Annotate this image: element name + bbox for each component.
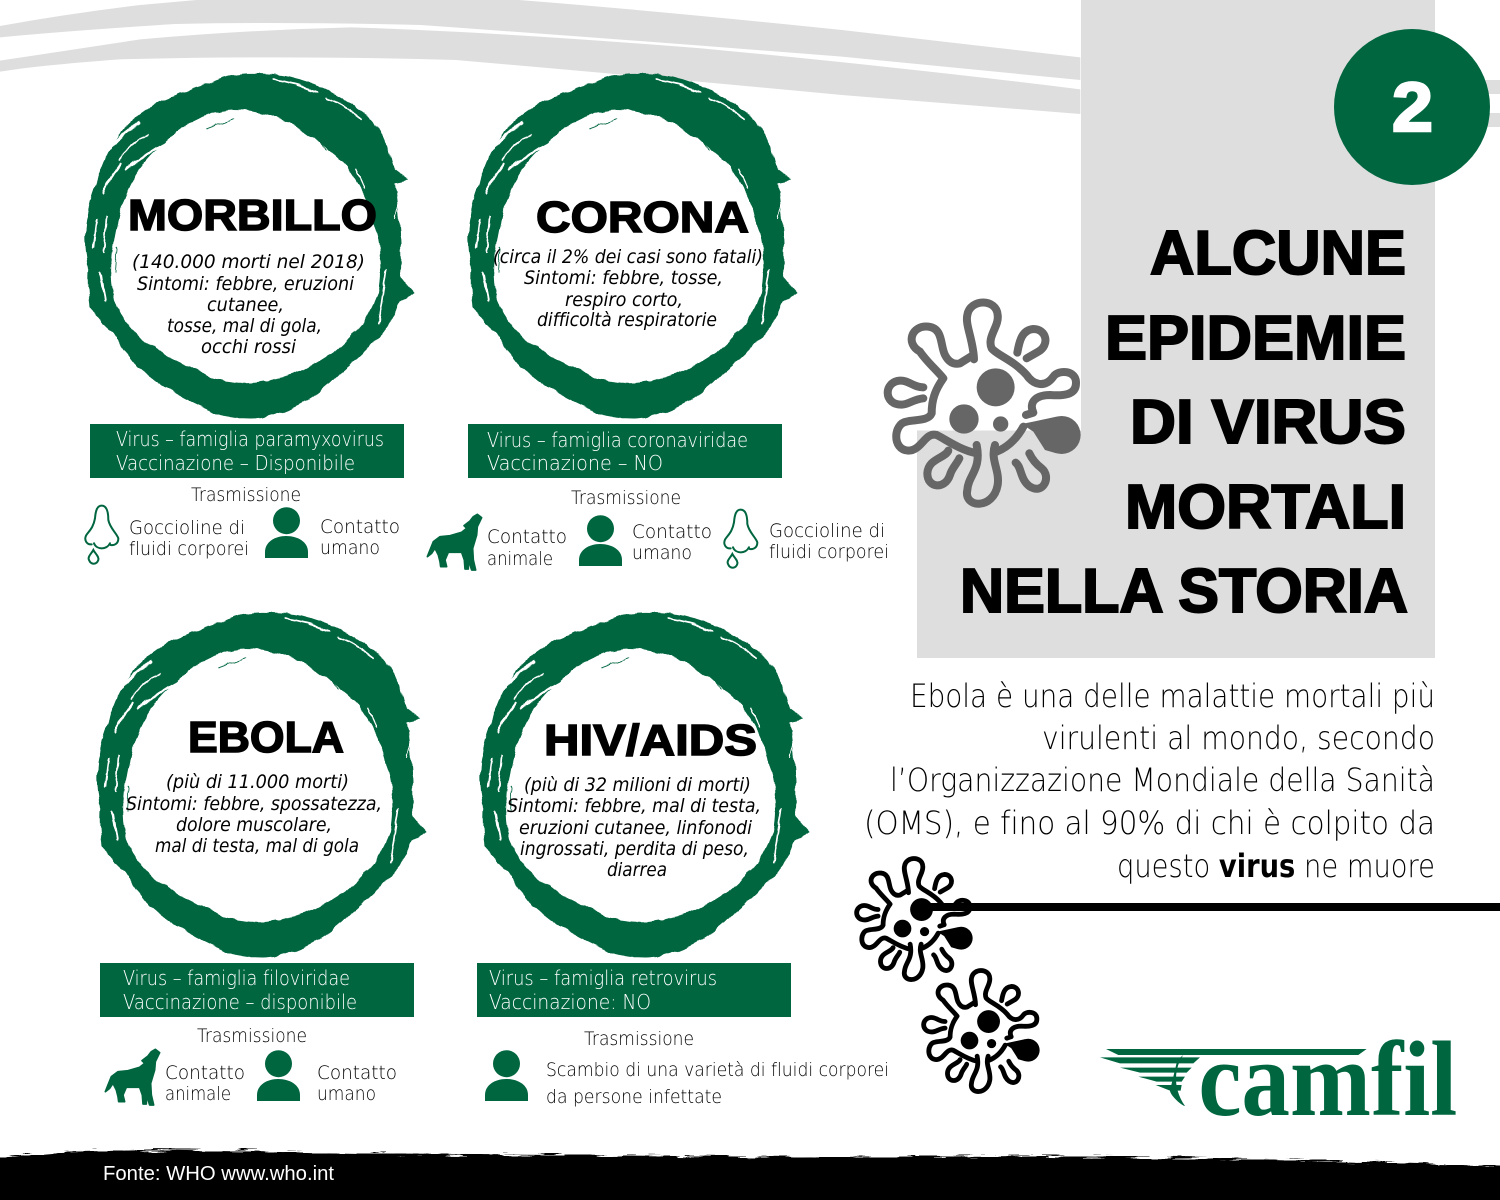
brush ring: Morbillo [85, 73, 415, 419]
icon: black virus lower [924, 971, 1040, 1092]
heading: Ebola: EBOLA [188, 713, 344, 762]
text block: Ebola description: Ebola è una delle malattie mortali più [910, 677, 1435, 715]
symptoms: Corona [493, 246, 763, 331]
symptoms: Morbillo: tosse, mal di gola, [167, 315, 322, 337]
symptoms: Morbillo: (140.000 morti nel 2018) [132, 251, 365, 273]
transmission: Corona: animale [487, 548, 553, 570]
title: EPIDEMIE [1105, 304, 1406, 373]
symptoms: HIV/AIDS: (più di 32 milioni di morti) [524, 774, 751, 796]
symptoms: Corona: difficoltà respiratorie [537, 309, 717, 331]
text block: Ebola description: questo virus ne muore [1117, 847, 1435, 885]
symptoms: Ebola: Sintomi: febbre, spossatezza, [126, 793, 382, 815]
text block: Ebola description [864, 677, 1435, 885]
transmission: Ebola [105, 1025, 397, 1105]
Camfil logo [1100, 1021, 1457, 1139]
info box: Corona [468, 424, 782, 478]
text block: Ebola description: l’Organizzazione Mondiale della Sanità [890, 761, 1435, 799]
symptoms: HIV/AIDS: Sintomi: febbre, mal di testa, [507, 795, 761, 817]
symptoms: Ebola: (più di 11.000 morti) [166, 771, 349, 793]
info box: HIV/AIDS: Vaccinazione: NO [489, 990, 651, 1014]
title: NELLA STORIA [960, 557, 1408, 626]
brush ring: HIV/AIDS [480, 612, 810, 958]
info box: HIV/AIDS [477, 963, 791, 1017]
transmission: Morbillo: fluidi corporei [129, 538, 249, 560]
symptoms: Morbillo: cutanee, [207, 294, 284, 316]
footer brush band [0, 1150, 1500, 1200]
info box: HIV/AIDS: Virus – famiglia retrovirus [489, 966, 717, 990]
symptoms: HIV/AIDS: eruzioni cutanee, linfonodi [519, 817, 753, 839]
transmission: Morbillo: Goccioline di [129, 517, 245, 539]
symptoms: Corona: (circa il 2% dei casi sono fatali) [493, 246, 763, 268]
transmission: Morbillo: Trasmissione [191, 484, 301, 506]
info box: Corona: Virus – famiglia coronaviridae [487, 428, 748, 452]
symptoms: Corona: Sintomi: febbre, tosse, [524, 267, 723, 289]
transmission: Corona: Contatto [632, 521, 712, 543]
transmission: Morbillo: umano [320, 537, 380, 559]
transmission: Corona: Goccioline di [769, 520, 885, 542]
transmission: Corona: Contatto [487, 526, 567, 548]
symptoms: Morbillo: occhi rossi [201, 336, 297, 358]
heading: Corona: CORONA [536, 193, 749, 242]
footer source text: Fonte: WHO www.who.int [103, 1163, 334, 1185]
title: MORTALI [1125, 473, 1406, 542]
heading: HIV/AIDS: HIV/AIDS [544, 716, 757, 765]
brush ring: Ebola [97, 612, 427, 958]
transmission: HIV/AIDS: da persone infettate [546, 1086, 722, 1108]
icon: black virus upper [857, 859, 973, 980]
transmission: Corona: umano [632, 542, 692, 564]
text block: Ebola description: (OMS), e fino al 90% di chi è colpito da [864, 804, 1435, 842]
symptoms: HIV/AIDS [507, 774, 761, 881]
number badge [1334, 29, 1490, 185]
transmission: Ebola: Contatto [165, 1062, 245, 1084]
info box: Ebola [100, 963, 414, 1017]
heading: Morbillo: MORBILLO [128, 191, 377, 240]
grey title background panel [917, 0, 1435, 658]
transmission: Ebola: umano [317, 1083, 376, 1105]
symptoms: HIV/AIDS: diarrea [607, 859, 667, 881]
text block: Ebola description: virulenti al mondo, secondo [1042, 719, 1435, 757]
symptoms: Morbillo: Sintomi: febbre, eruzioni [137, 273, 355, 295]
symptoms: Ebola: mal di testa, mal di gola [155, 835, 359, 857]
title: ALCUNE [1150, 219, 1406, 288]
transmission: Ebola: animale [165, 1083, 231, 1105]
transmission: Corona: Trasmissione [571, 487, 681, 509]
Camfil logo: camfil [1198, 1021, 1457, 1139]
info box: Morbillo: Vaccinazione – Disponibile [116, 451, 355, 475]
info box: Morbillo: Virus – famiglia paramyxovirus [116, 427, 384, 451]
transmission: Corona: fluidi corporei [769, 541, 889, 563]
title: DI VIRUS [1130, 388, 1406, 457]
transmission: HIV/AIDS [485, 1028, 889, 1108]
transmission: Morbillo [85, 484, 400, 564]
transmission: Morbillo: Contatto [320, 516, 400, 538]
number badge: 2 [1392, 68, 1433, 146]
symptoms: Corona: respiro corto, [565, 289, 683, 311]
symptoms: HIV/AIDS: ingrossati, perdita di peso, [520, 838, 749, 860]
symptoms: Ebola [126, 771, 382, 857]
transmission: HIV/AIDS: Scambio di una varietà di fluidi corporei [546, 1059, 889, 1081]
transmission: Corona [427, 487, 889, 570]
transmission: HIV/AIDS: Trasmissione [584, 1028, 694, 1050]
icon: large grey virus [888, 302, 1081, 504]
panel: Ebola [97, 612, 427, 1105]
title [960, 219, 1408, 626]
panel: Morbillo [85, 73, 415, 564]
info box: Ebola: Vaccinazione – disponibile [123, 990, 357, 1014]
panel: Corona [427, 73, 889, 570]
horizontal black rule [930, 903, 1500, 911]
symptoms: Ebola: dolore muscolare, [176, 814, 332, 836]
symptoms: Morbillo [132, 251, 365, 358]
brush ring: Corona [468, 73, 798, 419]
transmission: Ebola: Contatto [317, 1062, 397, 1084]
panel: HIV/AIDS [477, 612, 889, 1108]
info box: Morbillo [90, 424, 404, 478]
background brush strokes [0, 0, 1500, 127]
info box: Ebola: Virus – famiglia filoviridae [123, 966, 350, 990]
info box: Corona: Vaccinazione – NO [487, 451, 663, 475]
transmission: Ebola: Trasmissione [197, 1025, 307, 1047]
